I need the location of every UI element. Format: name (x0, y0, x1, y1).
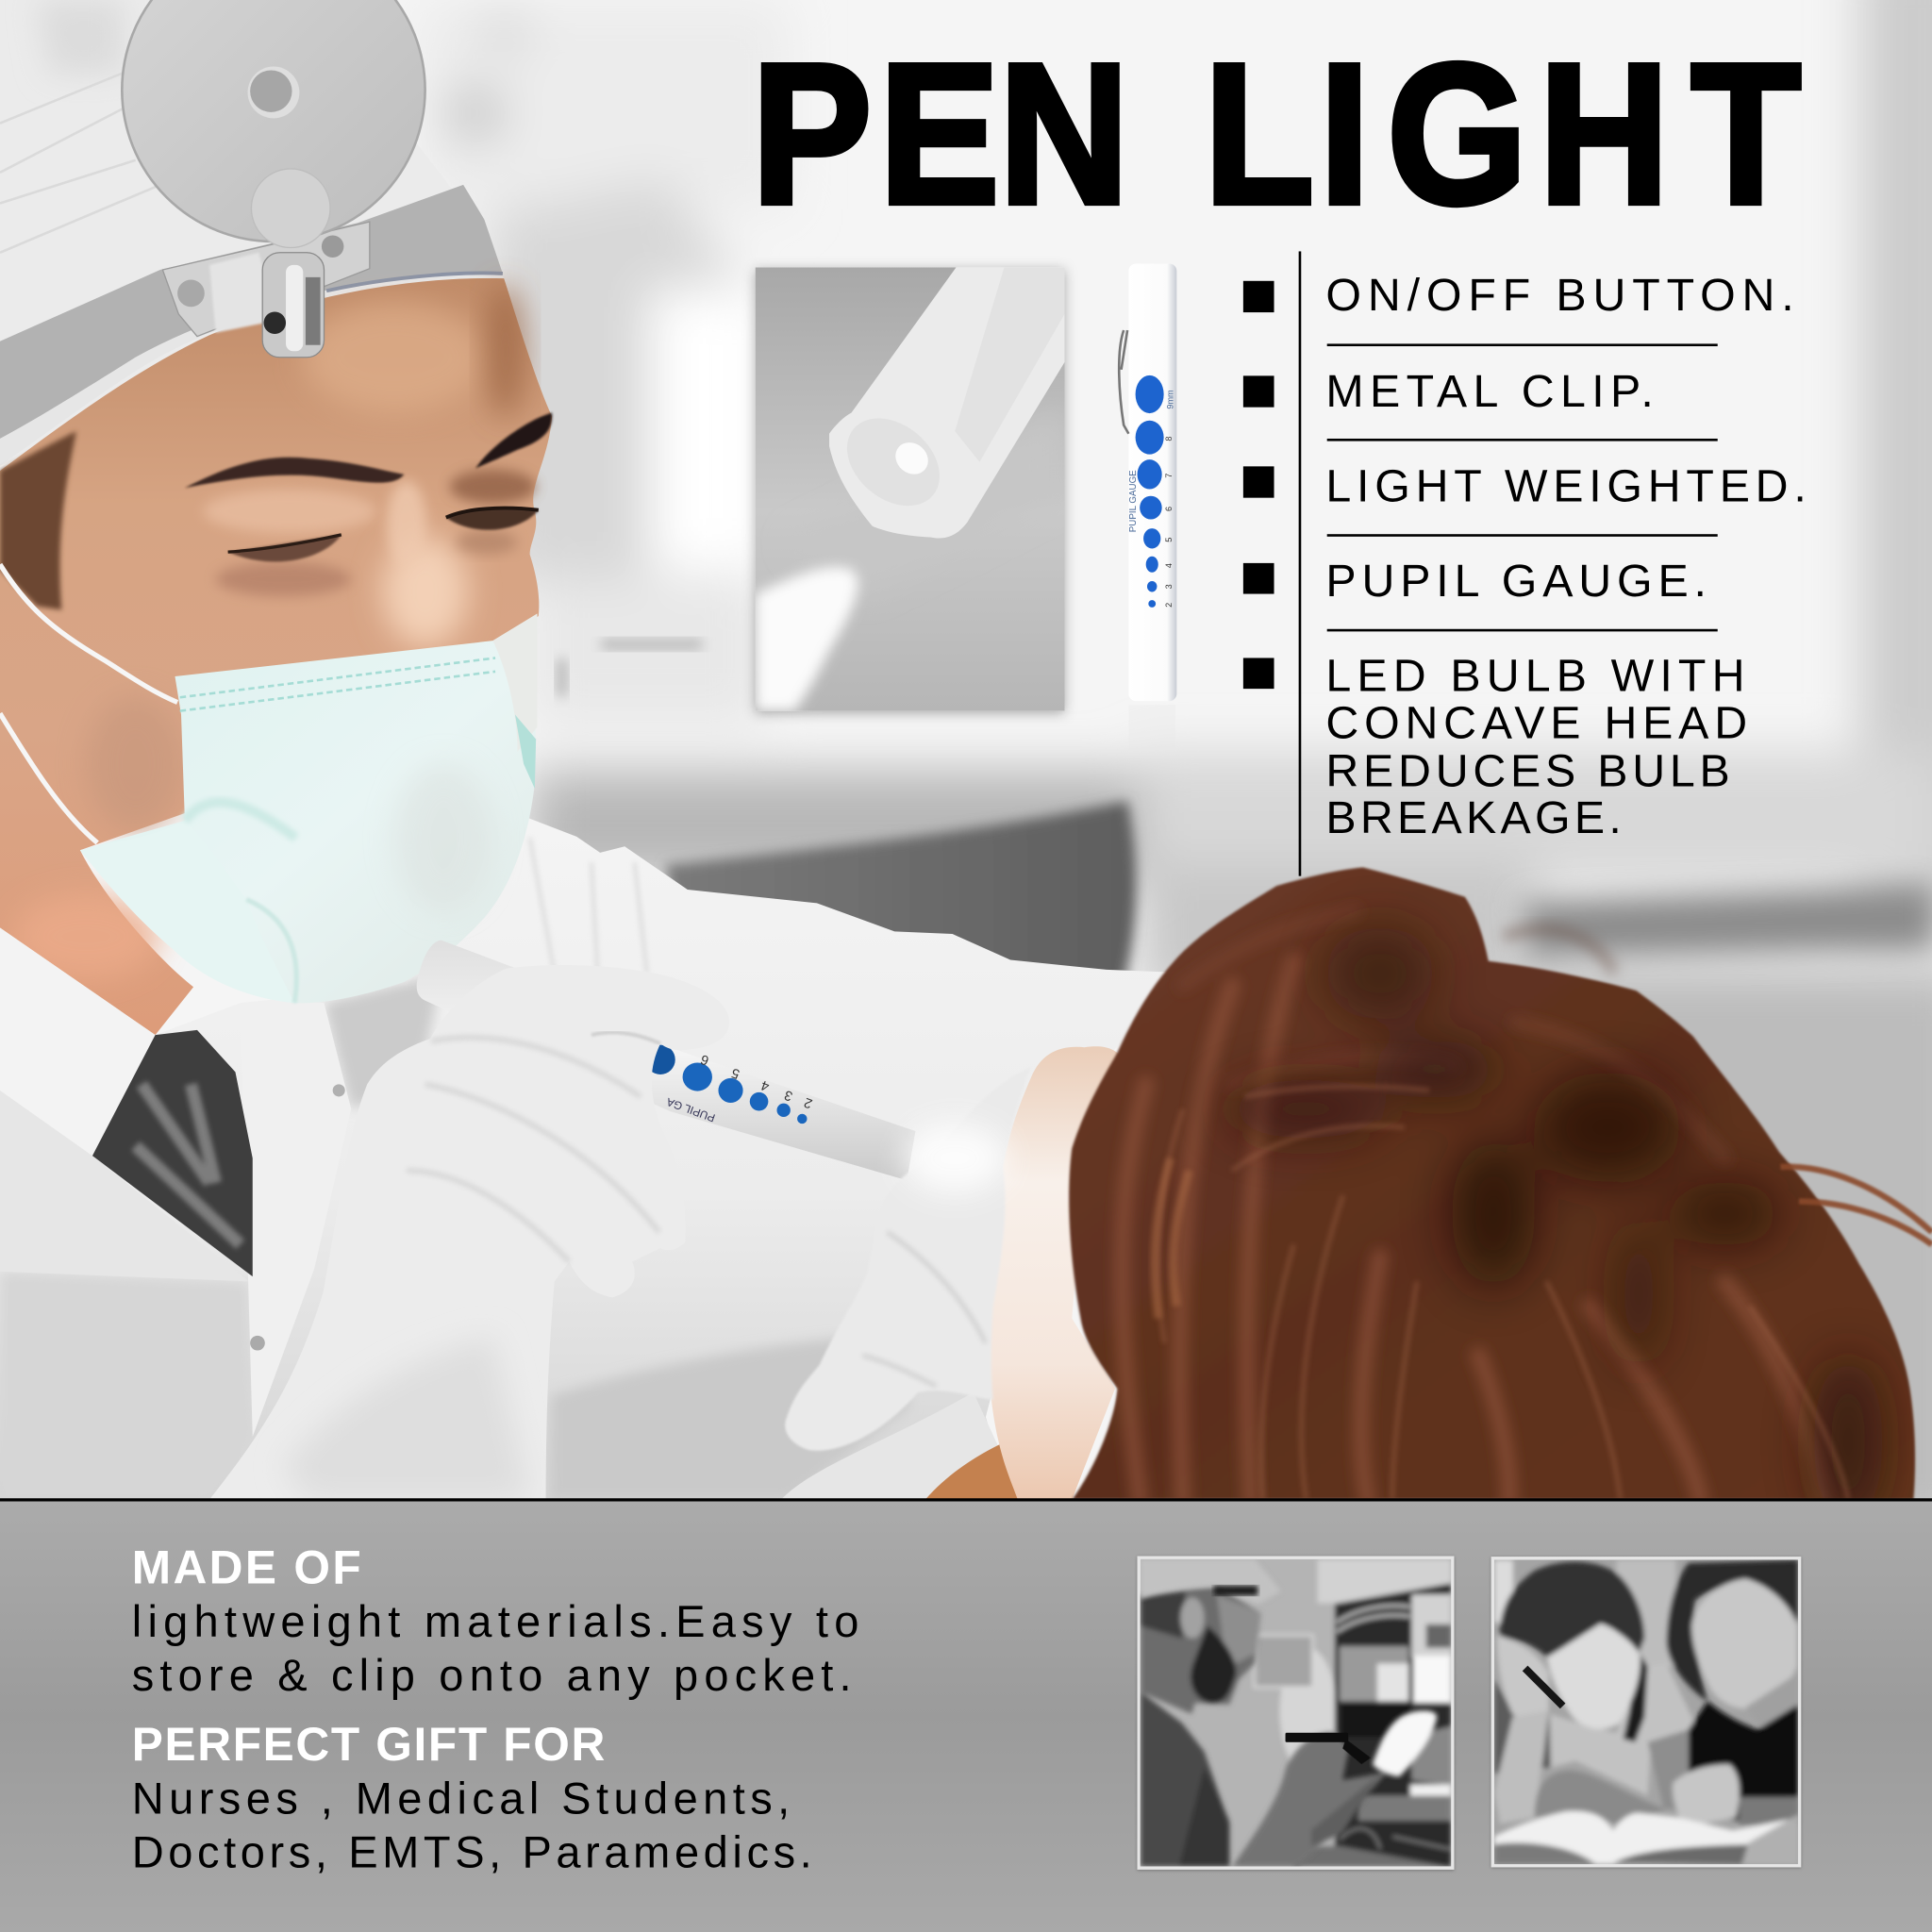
perfect gift text block (132, 1718, 812, 1876)
doctor's cap (0, 0, 504, 466)
perfect gift text block: Nurses , Medical Students, (132, 1774, 790, 1824)
shirt collar (0, 928, 155, 1035)
pen light in doctor's hand: 3 (783, 1087, 795, 1104)
perfect gift text block: Doctors, EMTS, Paramedics. (132, 1826, 812, 1876)
pen light product: 2 (1164, 603, 1174, 608)
head mirror (122, 0, 425, 358)
pen light product: 9mm (1165, 390, 1174, 409)
title: PEN LIGHT (752, 23, 1801, 245)
perfect gift text block: PERFECT GIFT FOR (132, 1718, 605, 1771)
feature list: PUPIL GAUGE. (1325, 556, 1707, 607)
feature list (1325, 270, 1807, 843)
pen light product: PUPIL GAUGE (1128, 470, 1139, 532)
photo: electrician with pen light (1138, 1556, 1455, 1870)
pen light product: 5 (1164, 538, 1174, 542)
patient's hair (1069, 868, 1932, 1528)
pen light in doctor's hand: PUPIL GA (665, 1095, 717, 1124)
pen light product (1119, 264, 1176, 754)
product close-up image (756, 267, 1064, 711)
bottom band (0, 1498, 1932, 1932)
photo background: clinic room (0, 0, 1932, 1534)
feature list: CONCAVE HEAD (1325, 697, 1747, 748)
pen light product: 3 (1164, 584, 1174, 589)
feature list: ON/OFF BUTTON. (1325, 270, 1794, 321)
pen light in doctor's hand: 4 (759, 1077, 772, 1093)
photo: mother and daughter reading (1491, 1557, 1801, 1867)
doctor's right glove (210, 1031, 675, 1498)
tie (92, 1030, 253, 1276)
pen light in doctor's hand: 2 (802, 1094, 814, 1111)
pen light product: 4 (1164, 563, 1174, 568)
patient's face (989, 1046, 1124, 1500)
made of text block: MADE OF (132, 1541, 361, 1593)
t-shirt and patient's shoulder (781, 1392, 1023, 1500)
doctor's left glove (785, 1174, 1005, 1451)
surgical mask (0, 564, 537, 1003)
vertical divider (1299, 251, 1301, 876)
pen light product: 7 (1164, 474, 1174, 478)
doctor's coat and sleeve (0, 818, 1168, 1500)
pen light in doctor's hand (417, 941, 915, 1180)
made of text block: store & clip onto any pocket. (132, 1650, 852, 1700)
doctor's side hair (0, 431, 76, 610)
feature list: REDUCES BULB (1325, 745, 1730, 796)
light beam glow (903, 1124, 1007, 1192)
pen light product: 6 (1164, 507, 1174, 511)
feature list: LIGHT WEIGHTED. (1325, 461, 1807, 512)
feature list: LED BULB WITH (1325, 651, 1744, 702)
pen light product: 8 (1164, 437, 1174, 441)
pen light in doctor's hand: 5 (729, 1065, 741, 1081)
made of text block (132, 1541, 858, 1700)
pen light in doctor's hand: 6 (699, 1051, 711, 1068)
doctor's eyebrows and eyes (185, 413, 552, 561)
doctor's face and neck (0, 278, 552, 1035)
made of text block: lightweight materials.Easy to (132, 1596, 858, 1646)
bullet squares (1243, 281, 1274, 689)
feature list: BREAKAGE. (1325, 792, 1622, 843)
feature list: METAL CLIP. (1325, 366, 1654, 417)
